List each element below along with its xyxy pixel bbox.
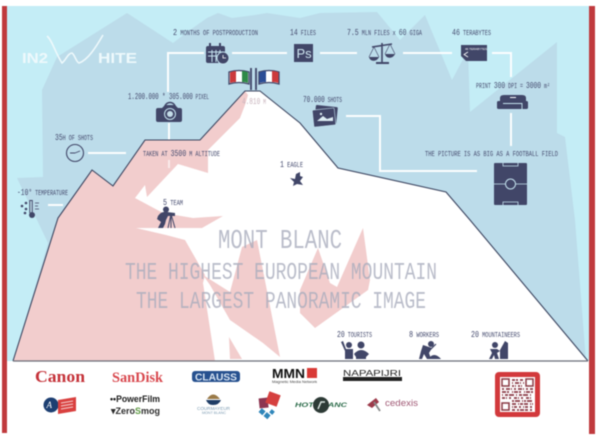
- label: tourists: 20 TOURISTS: [337, 329, 372, 340]
- logo: cedexis: [367, 398, 418, 411]
- logo: Napapijri: NAPAPIJRI: [343, 369, 401, 378]
- label: mountaineers: 20 MOUNTAINEERS: [471, 329, 520, 340]
- label: giga: 7.5 MLN FILES x 60 GIGA: [347, 27, 422, 38]
- icon: worker: [419, 341, 441, 359]
- mountain outline: [13, 91, 588, 361]
- logo: Clauss: CLAUSS: [195, 372, 237, 384]
- icon: photoshop: [294, 44, 313, 62]
- label: altitude of summit: 4.810 M: [242, 96, 266, 107]
- logo: Napapijri: [343, 369, 402, 381]
- logo: IN2 WHITE: HITE: [98, 50, 137, 67]
- pink shaded face: [13, 91, 248, 361]
- logo: Hot Blanc: [295, 397, 348, 413]
- logo: Canon: Canon: [35, 367, 86, 386]
- logo: MMN: Magnetic Media Network: [272, 380, 317, 384]
- label: postproduction: 2 MONTHS OF POSTPRODUCTION: [173, 27, 258, 38]
- logo: MMN: MMN: [272, 366, 305, 381]
- logo: Courmayeur Mont Blanc: MONT BLANC: [202, 410, 226, 415]
- icon: camera: [156, 102, 182, 122]
- label: hours of shots: 35H OF SHOTS: [55, 132, 93, 143]
- left red border: [2, 6, 7, 433]
- label: terabytes: 46 TERABYTES: [452, 27, 491, 38]
- flag pole: [251, 68, 256, 90]
- title: Mont Blanc: MONT BLANC: [218, 227, 342, 257]
- logo: AC flag: [44, 397, 76, 414]
- icon: photographer with tripod: [157, 206, 175, 228]
- label: taken at altitude: TAKEN AT 3500 M ALTITUDE: [143, 148, 220, 159]
- logo: Courmayeur Mont Blanc: [197, 394, 231, 415]
- sky background: [7, 6, 589, 361]
- label: team: 5 TEAM: [163, 197, 183, 208]
- icon: hard drive: 46 TERABYTES: [465, 47, 487, 51]
- icon: clock: [66, 144, 84, 162]
- logo: Hot Blanc: HOT BLANC: [295, 403, 348, 409]
- label: pixel: 1.200.000 * 305.000 PIXEL: [128, 91, 209, 102]
- logo: Courmayeur Mont Blanc: COURMAYEUR: [197, 406, 231, 411]
- logo: cedexis: cedexis: [385, 398, 418, 409]
- label: files: 14 FILES: [290, 27, 316, 38]
- icon: printer: [497, 95, 528, 109]
- logo: ZeroSmog: ▾ZeroSmog: [110, 406, 160, 417]
- pink rock band: [203, 240, 280, 357]
- logo: SanDisk: SanDisk: [112, 370, 164, 386]
- connector lines: [48, 53, 511, 205]
- icon: calendar: [206, 43, 229, 64]
- logo: AC flag: A: [46, 400, 52, 410]
- subtitle: largest panoramic: THE LARGEST PANORAMIC IMAGE: [136, 289, 426, 316]
- QR code: [495, 372, 540, 417]
- distant mountains: [13, 12, 586, 361]
- icon: tourists: [341, 341, 369, 359]
- base line: [13, 360, 588, 362]
- icon: thermometer: [21, 200, 39, 218]
- icon: football field: [494, 163, 527, 205]
- icon: eagle: [290, 172, 303, 186]
- pink rock right: [300, 228, 370, 328]
- icon: photoshop: Ps: [296, 46, 312, 61]
- icon: scale: [369, 43, 395, 64]
- pink rock triangle: [229, 337, 242, 359]
- subtitle: highest mountain: THE HIGHEST EUROPEAN MOUNTAIN: [125, 260, 437, 287]
- logo: IN2 WHITE: IN2: [22, 50, 48, 67]
- mountain body: [13, 91, 588, 361]
- label: temperature: -10° TEMPERATURE: [17, 187, 68, 198]
- icon: photos: [312, 105, 338, 127]
- label: eagle: 1 EAGLE: [280, 159, 303, 170]
- faint line across pink: [168, 160, 170, 168]
- icon: hard drive: [461, 45, 487, 61]
- logo: coloured diamonds: [259, 391, 281, 419]
- right red border: [589, 6, 595, 434]
- icon: mountaineer: [489, 341, 508, 359]
- label: shots: 70.000 SHOTS: [303, 94, 342, 105]
- logo: PowerFilm: ••PowerFilm: [110, 394, 160, 405]
- label: print: PRINT 300 DPI = 3000 m²: [476, 80, 550, 91]
- logo: IN2 WHITE: [22, 35, 137, 67]
- logo: MMN: [272, 366, 317, 384]
- flag: France: [259, 70, 279, 84]
- flag: Italy: [229, 70, 249, 84]
- label: workers: 8 WORKERS: [409, 329, 439, 340]
